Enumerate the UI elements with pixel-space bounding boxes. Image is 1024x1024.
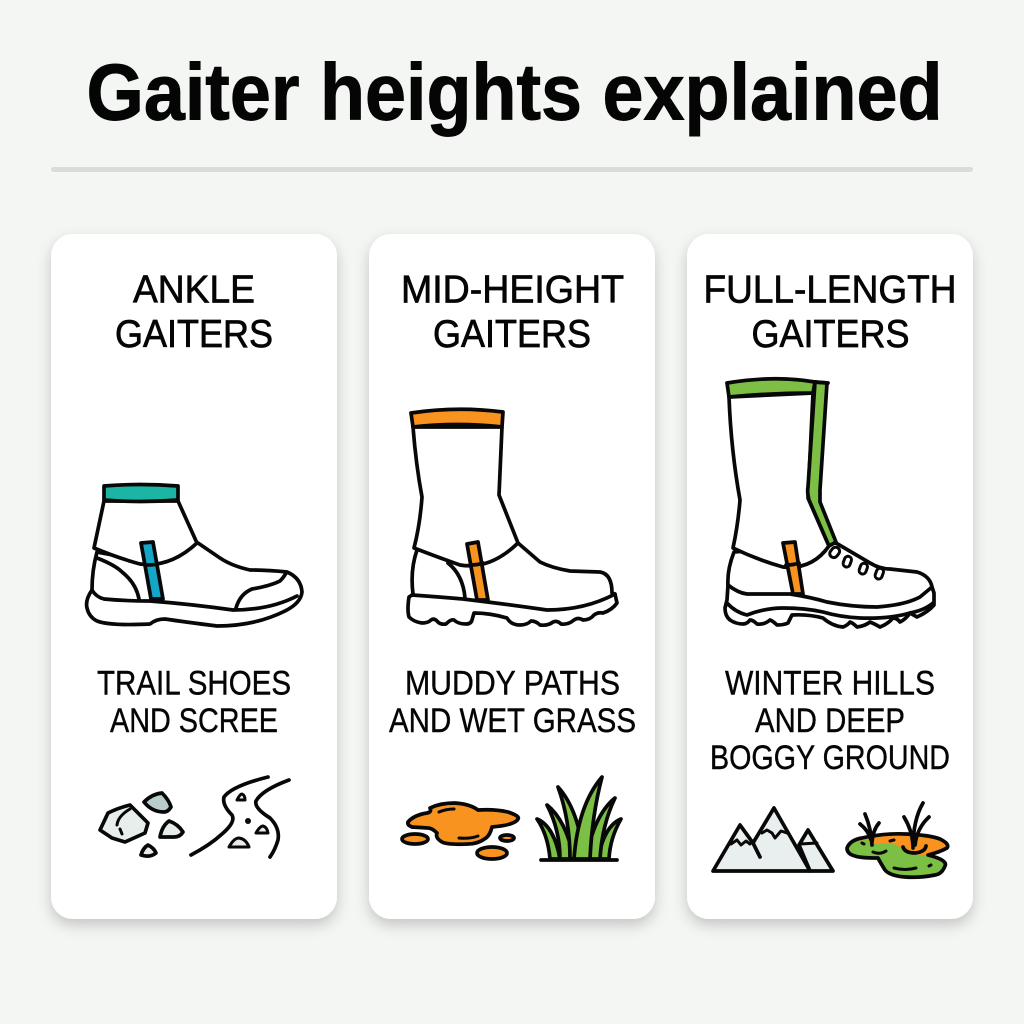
caption: ankle gaiters use (97, 664, 291, 740)
icon: boggy pool with reeds (847, 803, 948, 877)
icon: wet grass (537, 777, 621, 860)
heading: mid-height gaiters: GAITERS (433, 313, 591, 356)
heading: full-length gaiters: GAITERS (752, 313, 910, 356)
icon: mud puddle (402, 803, 518, 859)
heading: full-length gaiters (704, 268, 956, 356)
icon: snowy mountains (713, 808, 833, 871)
caption: full-length gaiters use: AND DEEP (755, 702, 905, 740)
panel: full-length gaiters (687, 234, 973, 919)
illustration: full-length gaiter on boot (725, 379, 934, 627)
heading: full-length gaiters: FULL-LENGTH (704, 268, 956, 312)
heading: mid-height gaiters (401, 268, 624, 356)
caption: ankle gaiters use: TRAIL SHOES (97, 664, 291, 702)
caption: full-length gaiters use (710, 664, 950, 777)
caption: mid-height gaiters use: MUDDY PATHS (405, 664, 620, 702)
icon: rocky trail (191, 777, 289, 857)
title: Gaiter heights explained (86, 48, 942, 136)
caption: full-length gaiters use: BOGGY GROUND (710, 739, 950, 777)
caption: mid-height gaiters use (389, 664, 636, 740)
icon: scree rocks (100, 793, 183, 856)
heading: mid-height gaiters: MID-HEIGHT (401, 268, 624, 312)
illustration: ankle gaiter on trail shoe (87, 484, 302, 626)
caption: ankle gaiters use: AND SCREE (110, 702, 278, 740)
heading: ankle gaiters: ANKLE (133, 268, 255, 312)
panel: mid-height gaiters (369, 234, 655, 919)
panel: ankle gaiters (51, 234, 337, 919)
heading: ankle gaiters: GAITERS (115, 313, 273, 356)
illustration: mid-height gaiter on boot (408, 409, 617, 625)
heading: ankle gaiters (115, 268, 273, 356)
caption: full-length gaiters use: WINTER HILLS (725, 664, 935, 702)
caption: mid-height gaiters use: AND WET GRASS (389, 702, 636, 740)
